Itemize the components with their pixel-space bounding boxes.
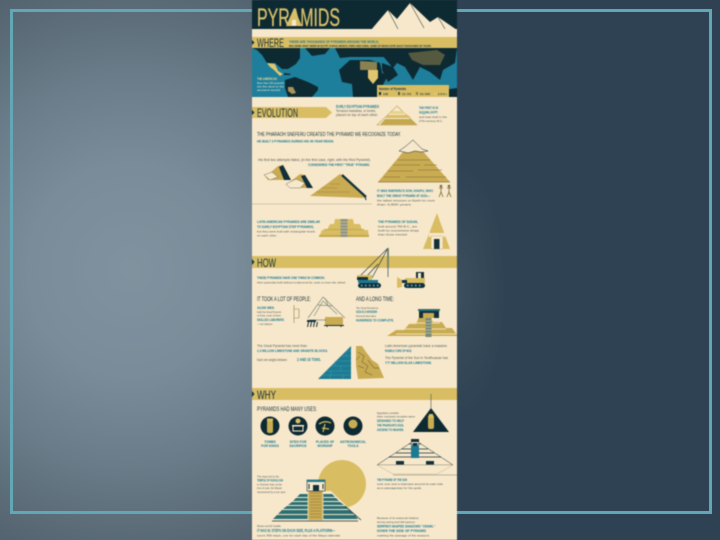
temple of kukulcan text <box>257 474 286 494</box>
crane <box>357 248 388 288</box>
section band: how: HOW <box>257 256 276 270</box>
sudan pyramids text: than those erected <box>378 232 407 236</box>
how intro text: their pyramids built without a diamond bit, tools or even the wheel. <box>257 280 346 284</box>
bulldozer <box>397 272 425 288</box>
great pyramid weight text <box>257 344 328 362</box>
great pyramid illustration <box>378 140 450 182</box>
great pyramid weight text: 2.3 MILLION LIMESTONE AND GRANITE BLOCKS. <box>257 349 328 353</box>
the americas note: dot the land of the <box>257 84 284 88</box>
pyramid of the sun text: took over and a staircase around its east side <box>377 482 443 486</box>
mexico <box>267 63 283 76</box>
icon: tomb: TOMBS <box>264 440 276 444</box>
three attempts text <box>258 158 370 167</box>
early egyptian pyramids text: EARLY EGYPTIAN PYRAMIDS <box>336 104 379 109</box>
khufu text: BUILT THE GREAT PYRAMID AT GIZA— <box>377 193 430 198</box>
egyptians text: their mortuary temples were <box>377 414 415 418</box>
temple of kukulcan text: in Chichén Itzá; at the <box>257 482 282 486</box>
el castillo text: IT HAS 91 STEPS ON EACH SIDE, PLUS A PLATFORM— <box>257 528 336 533</box>
sudan pyramids text: built by successive kings <box>378 228 420 232</box>
great serpent text: Because of its seasonal shadow, <box>377 516 419 520</box>
egyptians text: Egyptians consider <box>377 411 399 415</box>
khufu text: than 3,800 years. <box>377 202 412 206</box>
china <box>408 50 445 65</box>
egyptian figures <box>439 185 451 197</box>
title: PYRAMIDS <box>257 4 340 32</box>
rubble block <box>356 346 384 379</box>
section band: where: WHERE <box>257 36 284 50</box>
latin american pyramids text: on each other. <box>257 234 277 238</box>
temple of kukulcan text: represented by a sun spot. <box>257 490 286 494</box>
section band: how <box>252 256 457 270</box>
it took a lot of people: SKILLED LABORERS <box>257 317 284 322</box>
the americas note: ancient world <box>257 88 280 92</box>
icon: sacrifice site <box>288 416 308 448</box>
sudan pyramids text: THE PYRAMIDS OF SUDAN, <box>378 219 418 224</box>
bent pyramid <box>310 174 366 200</box>
africa <box>339 60 388 97</box>
south america <box>285 77 318 97</box>
egyptians text: DESIGNED TO HELP <box>377 419 404 423</box>
it took a lot of people: build the Great Pyramid <box>257 310 281 314</box>
icon: worship: PLACES OF <box>316 440 334 444</box>
map legend <box>377 85 449 97</box>
latin american pyramids text: but they were built with rectangular levels <box>257 230 316 234</box>
latin american step pyramid <box>319 219 369 237</box>
ground line <box>252 203 372 205</box>
where intro text: THERE ARE THOUSANDS OF PYRAMIDS AROUND THE WORLD, <box>289 40 379 44</box>
early egyptian pyramids text: placed on top of each other. <box>336 113 378 117</box>
great serpent text <box>377 516 435 538</box>
sudan <box>368 70 378 84</box>
pyramid of the sun text: as a passageway for the gods. <box>377 486 422 490</box>
latin american pyramids text <box>257 219 320 238</box>
icon: worship <box>316 416 334 448</box>
egyptians text: THE PHARAOH'S SOUL <box>377 424 404 428</box>
stepped pyramid with temple <box>387 309 457 337</box>
asia <box>382 48 457 80</box>
first in saqqara text: and was built in the <box>419 115 447 119</box>
it took a lot of people: 34,000 MEN <box>257 305 274 310</box>
europe <box>335 48 400 58</box>
world map <box>252 48 457 97</box>
three attempts text: His first two attempts failed, (in the first case, right, with the Red Pyramid) <box>258 158 370 162</box>
and a long time: that would have taken <box>356 314 376 318</box>
the americas note: More than 100 pyramids <box>257 81 284 85</box>
how intro text <box>257 275 346 284</box>
great pyramid weight text: Each one weighs between <box>257 358 287 362</box>
sun circle <box>318 460 366 508</box>
north america <box>252 48 300 69</box>
pyramid of the sun text: THE PYRAMID OF THE SUN <box>377 477 407 482</box>
el castillo text <box>257 524 341 538</box>
section band: why <box>252 388 457 402</box>
map legend: 11-50 <box>402 92 411 96</box>
great serpent text: during spring and fall equinox <box>377 520 415 524</box>
icon: sacrifice site: SACRIFICE <box>289 444 307 448</box>
khufu text: the tallest structure on Earth for more <box>377 198 435 202</box>
meidum pyramid <box>264 165 291 180</box>
sudan and giza facts <box>385 344 448 365</box>
great pyramid weight text: The Great Pyramid has more than <box>257 344 307 348</box>
icon: astronomical tool: ASTRONOMICAL <box>340 440 366 444</box>
latin american pyramids text: TO EARLY EGYPTIAN STEP PYRAMIDS, <box>257 224 314 229</box>
sudan pyramids text <box>378 219 420 236</box>
map legend: Number of Pyramids <box>379 87 406 91</box>
early egyptian pyramids text: Terraced mastabas, or tombs, <box>336 109 376 113</box>
it took a lot of people: —not slaves. <box>257 322 273 326</box>
great serpent text: marking the passage of the seasons. <box>377 534 430 538</box>
sneferu heading: HE BUILT 3 PYRAMIDS DURING HIS 45-YEAR REIGN. <box>257 140 334 144</box>
first in saqqara text: THE FIRST IS IN <box>419 105 438 110</box>
sudan and giza facts: The Pyramid of the Sun in Teotihuacan has <box>385 356 448 360</box>
egyptians text: ASCEND TO HEAVEN. <box>377 428 404 432</box>
pharaoh pyramid icon <box>413 394 449 432</box>
latin american pyramids text: LATIN AMERICAN PYRAMIDS ARE SIMILAR <box>257 219 320 224</box>
map legend: 100+ <box>438 92 447 96</box>
sneferu heading <box>257 132 401 144</box>
khufu text <box>377 188 435 206</box>
first in saqqara text: SAQQARA, EGYPT. <box>419 110 438 114</box>
temple of kukulcan text: TEMPLE OF KUKULCAN <box>257 478 283 482</box>
el castillo text: count 365 steps, one for each day of the Maya calendar. <box>257 534 341 538</box>
and a long time: HUNDREDS TO COMPLETE. <box>356 318 394 322</box>
egypt <box>360 61 377 70</box>
khufu text: IT WAS SNEFERU'S SON, KHUFU, WHO <box>377 188 433 193</box>
three attempts text: CONSIDERED THE FIRST "TRUE" PYRAMID. <box>308 162 370 167</box>
it took a lot of people: IT TOOK A LOT OF PEOPLE: <box>257 297 311 303</box>
arabia <box>382 63 398 82</box>
title <box>257 4 340 32</box>
el castillo text: Mexico and El Castillo <box>257 524 281 528</box>
teal brick triangle <box>318 346 351 379</box>
great pyramid weight text: 2 AND 15 TONS. <box>297 357 321 362</box>
and a long time: The Great Pyramid at <box>356 306 378 310</box>
first in saqqara text <box>419 105 447 123</box>
first in saqqara text: 27th century B.C. <box>419 119 443 123</box>
right side glow <box>457 100 527 430</box>
pyramid of the sun cross section <box>377 439 457 475</box>
where intro text: INCLUDING MANY MORE IN EGYPT, SUDAN, MEXICO, PERU AND CHINA, SOME OF WHICH DATE BACK THOUSANDS OF YEARS <box>289 44 431 48</box>
el castillo pyramid <box>272 480 361 521</box>
icon: astronomical tool: TOOLS <box>348 444 358 448</box>
and a long time: AND A LONG TIME: <box>356 297 394 303</box>
map legend: 51-100 <box>420 92 430 96</box>
sudan and giza facts: RUBBLE CORE OF MUD. <box>385 349 412 353</box>
greenland <box>305 48 330 56</box>
where intro text <box>289 40 431 48</box>
icon: worship: WORSHIP <box>317 444 333 448</box>
early egyptian pyramids text <box>336 104 379 117</box>
stepped pyramid diagram <box>377 106 417 125</box>
many uses heading: PYRAMIDS HAD MANY USES: <box>257 407 317 413</box>
egyptians text <box>377 411 415 432</box>
map legend: 1-10 <box>383 92 388 96</box>
section band: evolution: EVOLUTION <box>257 106 298 120</box>
sneferu heading: THE PHARAOH SNEFERU CREATED THE PYRAMID WE RECOGNIZE TODAY. <box>257 132 401 138</box>
sudan pyramids text: built around 750 B.C., are <box>378 224 417 228</box>
sudan pyramid <box>423 213 450 249</box>
icon: tomb <box>260 416 280 448</box>
it took a lot of people: of Giza, most of them <box>257 314 281 318</box>
how intro text: THESE PYRAMIDS HAVE ONE THING IN COMMON: <box>257 275 325 280</box>
great serpent text: DOWN THE SIDE OF PYRAMID <box>377 529 426 533</box>
slide background <box>0 0 260 540</box>
icon: astronomical tool <box>340 416 366 448</box>
it took a lot of people <box>257 297 311 326</box>
great serpent text: SERPENT-SHAPED SHADOWS "CRAWL" <box>377 524 435 528</box>
temple of kukulcan text: The steps led to the <box>257 474 279 478</box>
workers and ramp illustration <box>294 297 345 327</box>
section band: why: WHY <box>257 388 276 402</box>
icon: sacrifice site: SITES FOR <box>290 440 307 444</box>
sudan and giza facts: 777 MILLION ELAS LIMESTONE. <box>385 361 432 365</box>
icon: tomb: FOR KINGS <box>261 444 279 448</box>
header <box>252 0 457 32</box>
and a long time <box>356 297 394 322</box>
the americas note <box>257 77 284 92</box>
sudan and giza facts: Latin American pyramids have a massive <box>385 344 447 348</box>
and a long time: GIZA IS A WONDER <box>356 310 377 314</box>
collapsed pyramid <box>286 174 313 188</box>
caribbean <box>284 73 291 75</box>
section band: where <box>252 36 457 50</box>
mountains illustration <box>371 3 457 30</box>
pyramid of the sun text <box>377 477 443 490</box>
peru <box>288 87 296 94</box>
the americas note: THE AMERICAS <box>257 77 277 81</box>
temple of kukulcan text: time of year, the Mayan <box>257 486 282 490</box>
australia <box>443 88 457 97</box>
